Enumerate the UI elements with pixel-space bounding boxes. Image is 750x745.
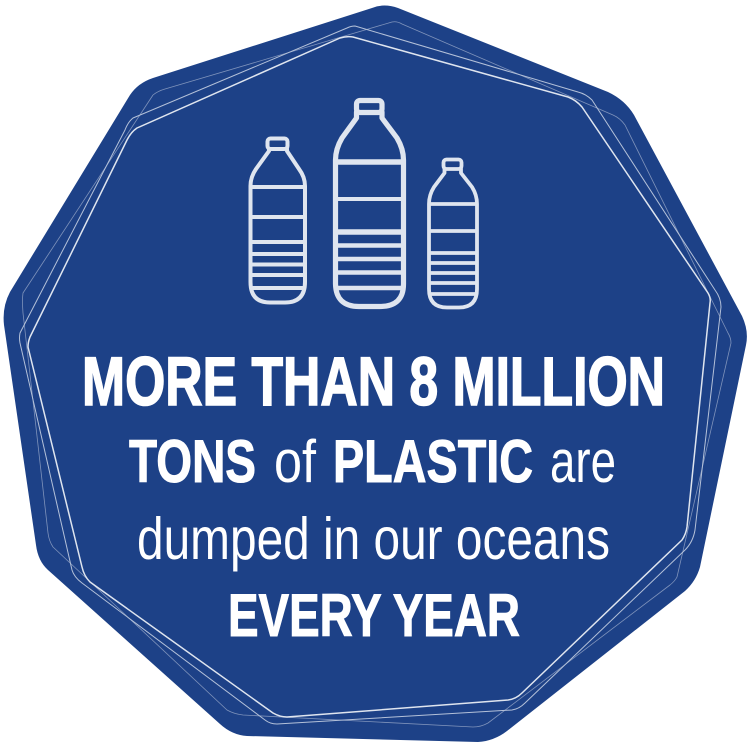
icon: three plastic bottles: [250, 100, 477, 308]
text line: tons of plastic are: [129, 428, 616, 495]
icon: small bottle: [429, 160, 477, 308]
icon: large bottle: [336, 100, 404, 306]
text line: every year: EVERY YEAR: [228, 582, 520, 649]
text line: dumped in our oceans: dumped in our oceans: [137, 506, 610, 572]
icon: medium bottle: [250, 138, 305, 302]
text line: tons of plastic are: are: [550, 428, 616, 495]
text line: tons of plastic are: PLASTIC: [333, 428, 533, 495]
text line: tons of plastic are: of: [274, 428, 316, 495]
text line: tons of plastic are: TONS: [129, 428, 256, 495]
